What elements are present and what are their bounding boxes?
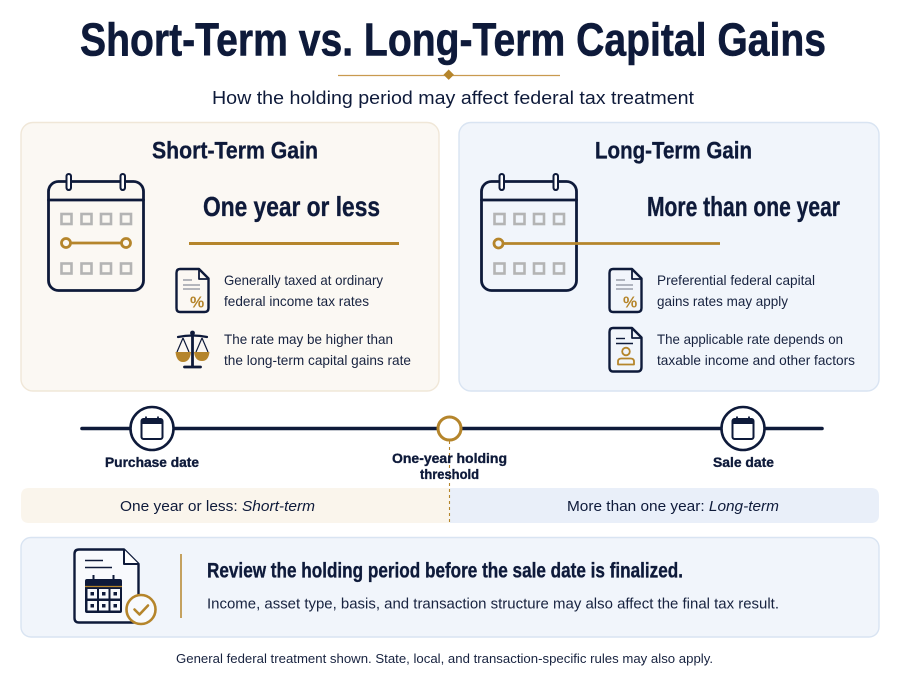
panel: long-term gain: [459, 122, 879, 391]
duration line: short-term: [189, 242, 399, 245]
text: preferential rates: gains rates may apply: [657, 293, 788, 309]
marker: sale date: [722, 407, 764, 450]
label: purchase date: Purchase date: [105, 454, 199, 470]
marker: one-year threshold: [438, 417, 461, 440]
icon: balance scales: [176, 331, 210, 367]
panel: short-term gain: [21, 122, 439, 391]
title divider with diamond: [338, 69, 560, 80]
duration label: long-term: More than one year: [647, 191, 840, 222]
icon: calendar with long holding span: [482, 174, 720, 290]
period bar: more than one year: [450, 488, 879, 523]
callout divider: [180, 554, 182, 618]
callout body: Income, asset type, basis, and transaction structure may also affect the final tax result.: [207, 596, 779, 612]
icon: preferential rate document: %: [623, 294, 637, 312]
text: rate comparison: The rate may be higher than: [224, 331, 393, 347]
subtitle: How the holding period may affect federal tax treatment: [212, 88, 694, 108]
text: rate comparison: [224, 331, 411, 368]
label: sale date: Sale date: [713, 454, 774, 470]
period bar: more than one year: More than one year: Long-term: [567, 498, 779, 515]
icon: calendar with short holding span: [48, 174, 144, 290]
text: ordinary income rates: [224, 272, 383, 309]
period bar: one year or less: [21, 488, 450, 523]
panel heading: long-term: Long-Term Gain: [595, 138, 752, 164]
icon: tax document with percent: [176, 269, 208, 312]
icon: preferential rate document: [610, 269, 642, 312]
text: preferential rates: [657, 272, 815, 309]
label: one-year holding threshold: One-year holding: [392, 450, 507, 466]
period bar: one year or less: One year or less: Short-term: [120, 498, 315, 515]
marker: purchase date: [130, 407, 174, 450]
text: ordinary income rates: federal income tax rates: [224, 293, 369, 309]
text: applicable rate factors: taxable income and other factors: [657, 352, 855, 368]
duration label: short-term: One year or less: [203, 191, 380, 222]
icon: tax document with percent: %: [190, 294, 204, 312]
text: applicable rate factors: [657, 331, 855, 368]
label: one-year holding threshold: threshold: [420, 466, 479, 482]
text: preferential rates: Preferential federal capital: [657, 272, 815, 288]
footnote: General federal treatment shown. State, local, and transaction-specific rules may also apply.: [176, 651, 713, 666]
label: one-year holding threshold: [392, 450, 507, 482]
text: applicable rate factors: The applicable rate depends on: [657, 331, 843, 347]
callout heading: Review the holding period before the sale date is finalized.: [207, 560, 683, 582]
panel heading: short-term: Short-Term Gain: [152, 138, 318, 164]
timeline: [82, 407, 822, 523]
icon: document with calendar and check: [74, 550, 156, 624]
callout: review the holding period: [21, 538, 879, 637]
text: ordinary income rates: Generally taxed at ordinary: [224, 272, 383, 288]
icon: taxpayer document: [610, 328, 642, 372]
text: rate comparison: the long-term capital gains rate: [224, 352, 411, 368]
